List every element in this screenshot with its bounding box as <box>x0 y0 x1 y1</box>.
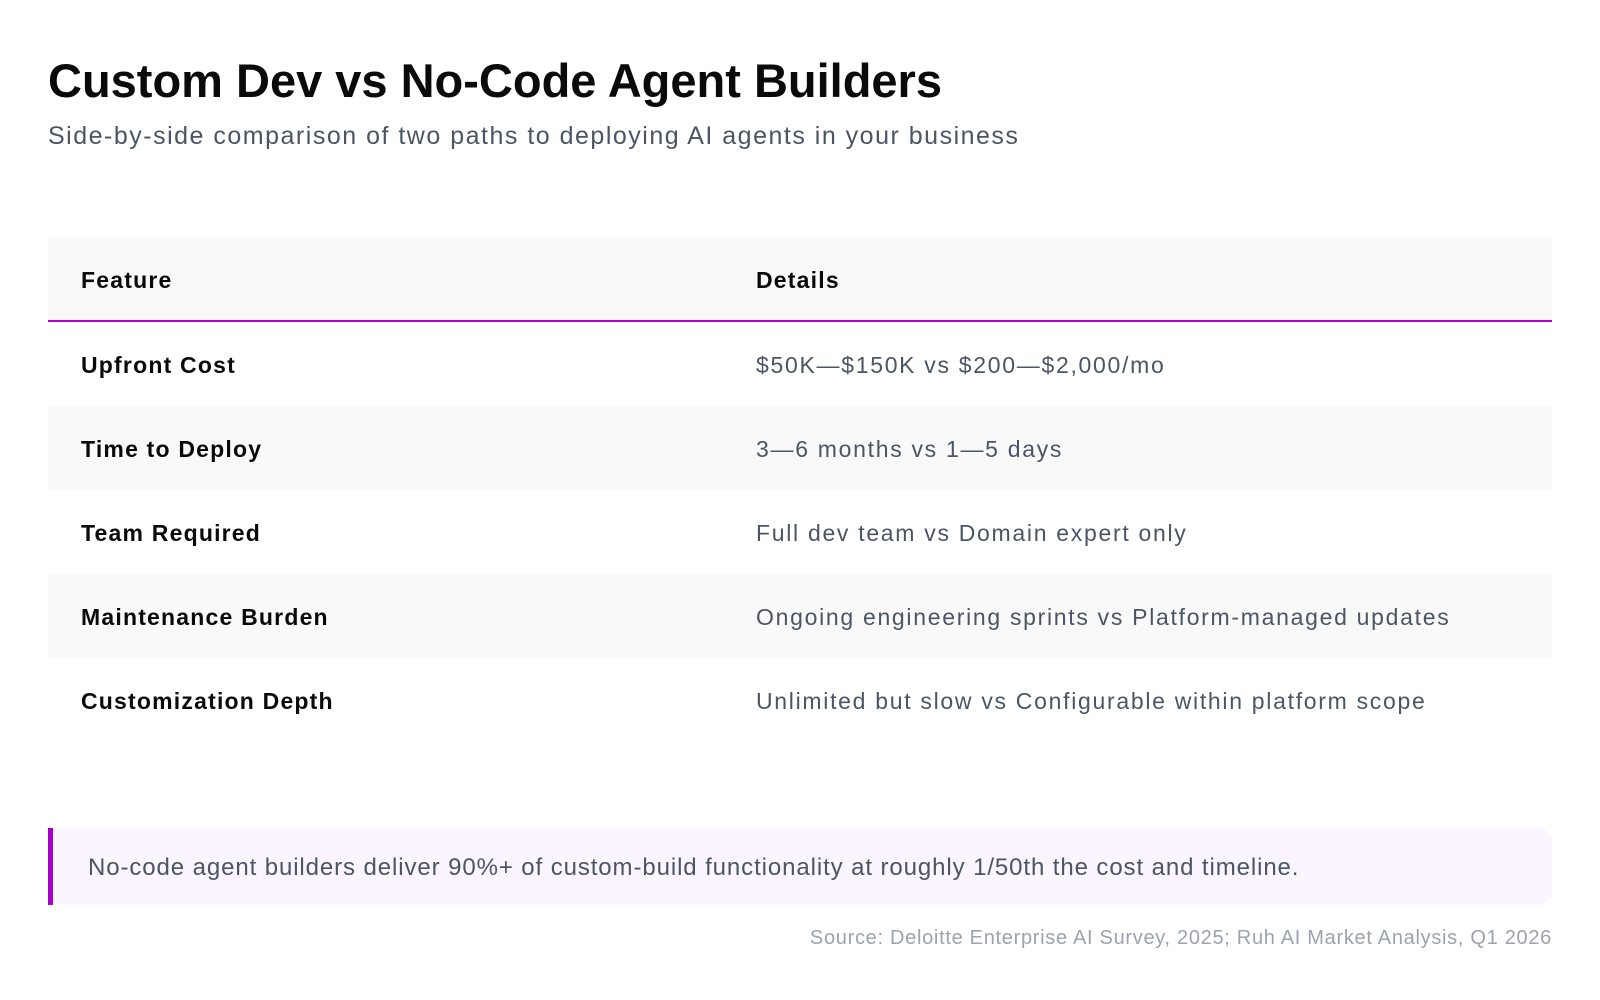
table header: Feature <box>81 267 172 293</box>
row: time to deploy: 3—6 months vs 1—5 days <box>756 436 1063 462</box>
row: upfront cost <box>81 352 1165 378</box>
row: time to deploy <box>48 406 1552 490</box>
row: maintenance burden: Ongoing engineering sprints vs Platform-managed updates <box>756 604 1450 630</box>
row: upfront cost: Upfront Cost <box>81 352 236 378</box>
source note: Source: Deloitte Enterprise AI Survey, 2025; Ruh AI Market Analysis, Q1 2026 <box>810 927 1552 949</box>
row: team required: Team Required <box>81 520 261 546</box>
table header: Details <box>756 267 840 293</box>
row: customization depth: Customization Depth <box>81 688 334 714</box>
row: maintenance burden <box>48 574 1552 658</box>
subtitle: Side-by-side comparison of two paths to deploying AI agents in your business <box>48 122 1019 150</box>
callout <box>48 828 1552 905</box>
row: customization depth: Unlimited but slow vs Configurable within platform scope <box>756 688 1426 714</box>
row: team required: Full dev team vs Domain expert only <box>756 520 1188 546</box>
row: time to deploy: Time to Deploy <box>81 436 262 462</box>
row: maintenance burden: Maintenance Burden <box>81 604 329 630</box>
table header <box>48 237 1552 322</box>
comparison table <box>48 267 1552 714</box>
row: team required <box>81 520 1188 546</box>
callout: No-code agent builders deliver 90%+ of custom-build functionality at roughly 1/50th the cost and timeline. <box>88 854 1299 881</box>
title: Custom Dev vs No-Code Agent Builders <box>48 54 942 107</box>
row: upfront cost: $50K—$150K vs $200—$2,000/mo <box>756 352 1165 378</box>
row: customization depth <box>81 688 1426 714</box>
